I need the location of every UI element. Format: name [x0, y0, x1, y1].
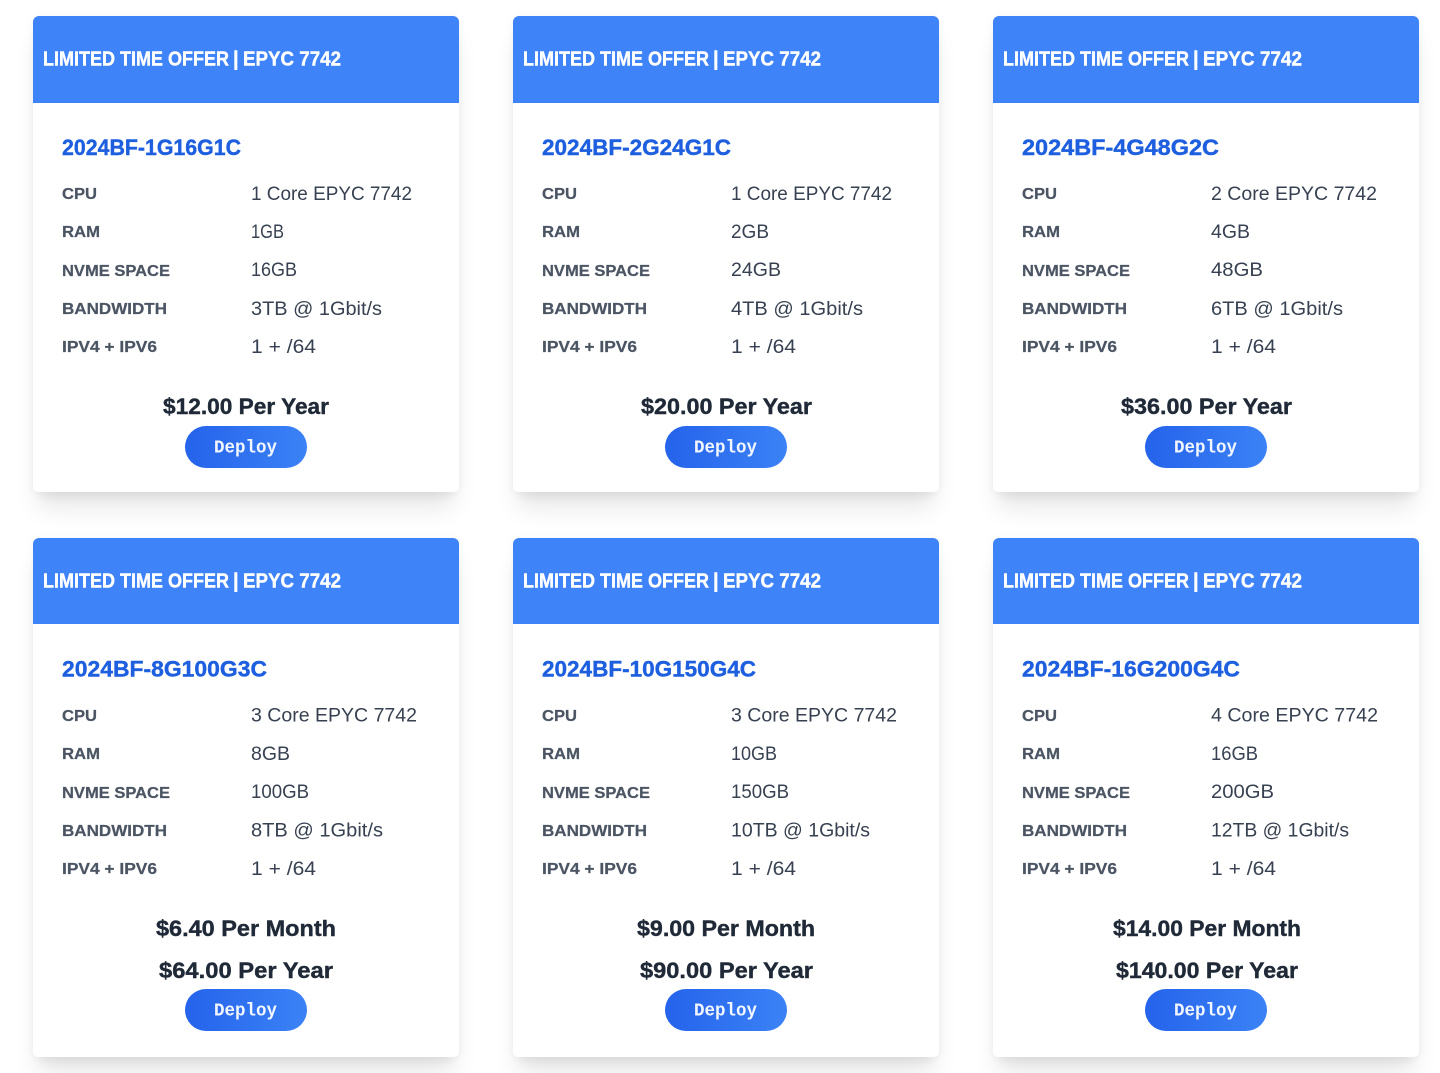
- panel: plan 2024BF-4G48G2C: [993, 16, 1419, 492]
- deploy button: [185, 989, 307, 1031]
- spec table: [62, 704, 417, 880]
- header banner: LIMITED TIME OFFER: [523, 48, 709, 70]
- deploy button: [665, 426, 787, 468]
- spec table: 4 Core EPYC 7742: [1211, 704, 1378, 726]
- spec table: 100GB: [251, 781, 309, 803]
- plan name: 2024BF-4G48G2C: [1022, 135, 1219, 160]
- spec table: [62, 183, 412, 358]
- plan name: 2024BF-2G24G1C: [542, 135, 731, 160]
- spec table: 1 Core EPYC 7742: [251, 183, 412, 205]
- spec table: 1 + /64: [731, 336, 796, 358]
- spec table: NVME SPACE: [1022, 263, 1130, 280]
- spec table: 1 + /64: [1211, 858, 1276, 880]
- header banner: [33, 538, 459, 624]
- spec table: BANDWIDTH: [542, 823, 647, 840]
- header banner: [33, 16, 459, 103]
- spec table: 2GB: [731, 221, 769, 243]
- spec table: NVME SPACE: [62, 785, 170, 802]
- deploy button: Deploy: [1174, 438, 1237, 458]
- panel: plan 2024BF-1G16G1C: [33, 16, 459, 492]
- panel: plan 2024BF-2G24G1C: [513, 16, 939, 492]
- spec table: BANDWIDTH: [1022, 823, 1127, 840]
- header banner: |: [1193, 48, 1199, 70]
- spec table: 2 Core EPYC 7742: [1211, 183, 1377, 205]
- spec table: 1GB: [251, 221, 284, 243]
- plan name: 2024BF-10G150G4C: [542, 656, 756, 682]
- spec table: IPV4 + IPV6: [1022, 339, 1117, 356]
- spec table: 150GB: [731, 781, 789, 803]
- spec table: RAM: [1022, 224, 1060, 241]
- spec table: RAM: [62, 746, 100, 763]
- price: $36.00 Per Year: [1121, 394, 1292, 419]
- spec table: 48GB: [1211, 259, 1263, 281]
- header banner: EPYC 7742: [723, 570, 821, 592]
- prices: $6.40 Per Month: [156, 916, 336, 941]
- deploy button: [665, 989, 787, 1031]
- spec table: BANDWIDTH: [62, 301, 167, 318]
- spec table: 16GB: [251, 259, 297, 281]
- spec table: [1022, 183, 1377, 358]
- spec table: 8TB @ 1Gbit/s: [251, 820, 383, 842]
- header banner: LIMITED TIME OFFER: [523, 570, 709, 592]
- spec table: CPU: [62, 708, 97, 725]
- spec table: 6TB @ 1Gbit/s: [1211, 298, 1343, 320]
- prices: [1113, 916, 1301, 983]
- spec table: IPV4 + IPV6: [542, 861, 637, 878]
- spec table: CPU: [1022, 708, 1057, 725]
- spec table: CPU: [542, 186, 577, 203]
- plan name: 2024BF-16G200G4C: [1022, 656, 1240, 682]
- spec table: 1 + /64: [1211, 336, 1276, 358]
- spec table: IPV4 + IPV6: [62, 339, 157, 356]
- header banner: [513, 538, 939, 624]
- spec table: BANDWIDTH: [62, 823, 167, 840]
- header banner: |: [713, 570, 719, 592]
- spec table: NVME SPACE: [1022, 785, 1130, 802]
- header banner: [513, 16, 939, 103]
- spec table: 3 Core EPYC 7742: [731, 704, 897, 726]
- spec table: 4GB: [1211, 221, 1250, 243]
- header banner: LIMITED TIME OFFER: [43, 570, 229, 592]
- spec table: [1022, 704, 1378, 880]
- deploy button: [185, 426, 307, 468]
- header banner: LIMITED TIME OFFER: [1003, 570, 1189, 592]
- panel: plan 2024BF-16G200G4C: [993, 538, 1419, 1057]
- prices: $64.00 Per Year: [159, 958, 333, 983]
- plan name: 2024BF-1G16G1C: [62, 135, 241, 160]
- spec table: 10TB @ 1Gbit/s: [731, 820, 870, 842]
- spec table: [542, 704, 897, 880]
- prices: [156, 916, 336, 983]
- spec table: 1 + /64: [731, 858, 796, 880]
- deploy button: Deploy: [694, 1002, 757, 1022]
- spec table: 1 Core EPYC 7742: [731, 183, 892, 205]
- deploy button: Deploy: [214, 1002, 277, 1022]
- spec table: IPV4 + IPV6: [1022, 861, 1117, 878]
- header banner: |: [713, 48, 719, 70]
- spec table: [542, 183, 892, 358]
- prices: $14.00 Per Month: [1113, 916, 1301, 941]
- spec table: RAM: [62, 224, 100, 241]
- header banner: EPYC 7742: [243, 570, 341, 592]
- header banner: EPYC 7742: [1203, 570, 1302, 592]
- header banner: EPYC 7742: [723, 48, 821, 70]
- header banner: |: [233, 48, 239, 70]
- spec table: 4TB @ 1Gbit/s: [731, 298, 863, 320]
- spec table: 1 + /64: [251, 336, 316, 358]
- header banner: |: [1193, 570, 1199, 592]
- spec table: RAM: [542, 746, 580, 763]
- spec table: CPU: [1022, 186, 1057, 203]
- prices: $90.00 Per Year: [640, 958, 813, 983]
- header banner: [993, 538, 1419, 624]
- deploy button: [1145, 989, 1267, 1031]
- spec table: 200GB: [1211, 781, 1274, 803]
- spec table: BANDWIDTH: [1022, 301, 1127, 318]
- spec table: RAM: [1022, 746, 1060, 763]
- spec table: 16GB: [1211, 743, 1258, 765]
- price: $20.00 Per Year: [641, 394, 812, 419]
- spec table: BANDWIDTH: [542, 301, 647, 318]
- prices: [637, 916, 815, 983]
- panel: plan 2024BF-10G150G4C: [513, 538, 939, 1057]
- spec table: 3TB @ 1Gbit/s: [251, 298, 382, 320]
- spec table: IPV4 + IPV6: [62, 861, 157, 878]
- spec table: CPU: [542, 708, 577, 725]
- prices: $140.00 Per Year: [1116, 958, 1298, 983]
- plan name: 2024BF-8G100G3C: [62, 656, 267, 682]
- spec table: 24GB: [731, 259, 781, 281]
- header banner: EPYC 7742: [1203, 48, 1302, 70]
- spec table: 8GB: [251, 743, 290, 765]
- deploy button: Deploy: [1174, 1002, 1237, 1022]
- header banner: LIMITED TIME OFFER: [1003, 48, 1189, 70]
- header banner: EPYC 7742: [243, 48, 341, 70]
- deploy button: [1145, 426, 1267, 468]
- panel: plan 2024BF-8G100G3C: [33, 538, 459, 1057]
- spec table: NVME SPACE: [62, 263, 170, 280]
- header banner: LIMITED TIME OFFER: [43, 48, 229, 70]
- deploy button: Deploy: [214, 438, 277, 458]
- spec table: 12TB @ 1Gbit/s: [1211, 820, 1349, 842]
- spec table: 3 Core EPYC 7742: [251, 704, 417, 726]
- spec table: NVME SPACE: [542, 263, 650, 280]
- price: $12.00 Per Year: [163, 394, 329, 419]
- header banner: |: [233, 570, 239, 592]
- spec table: CPU: [62, 186, 97, 203]
- spec table: RAM: [542, 224, 580, 241]
- header banner: [993, 16, 1419, 103]
- spec table: 1 + /64: [251, 858, 316, 880]
- spec table: IPV4 + IPV6: [542, 339, 637, 356]
- prices: $9.00 Per Month: [637, 916, 815, 941]
- deploy button: Deploy: [694, 438, 757, 458]
- spec table: 10GB: [731, 743, 777, 765]
- spec table: NVME SPACE: [542, 785, 650, 802]
